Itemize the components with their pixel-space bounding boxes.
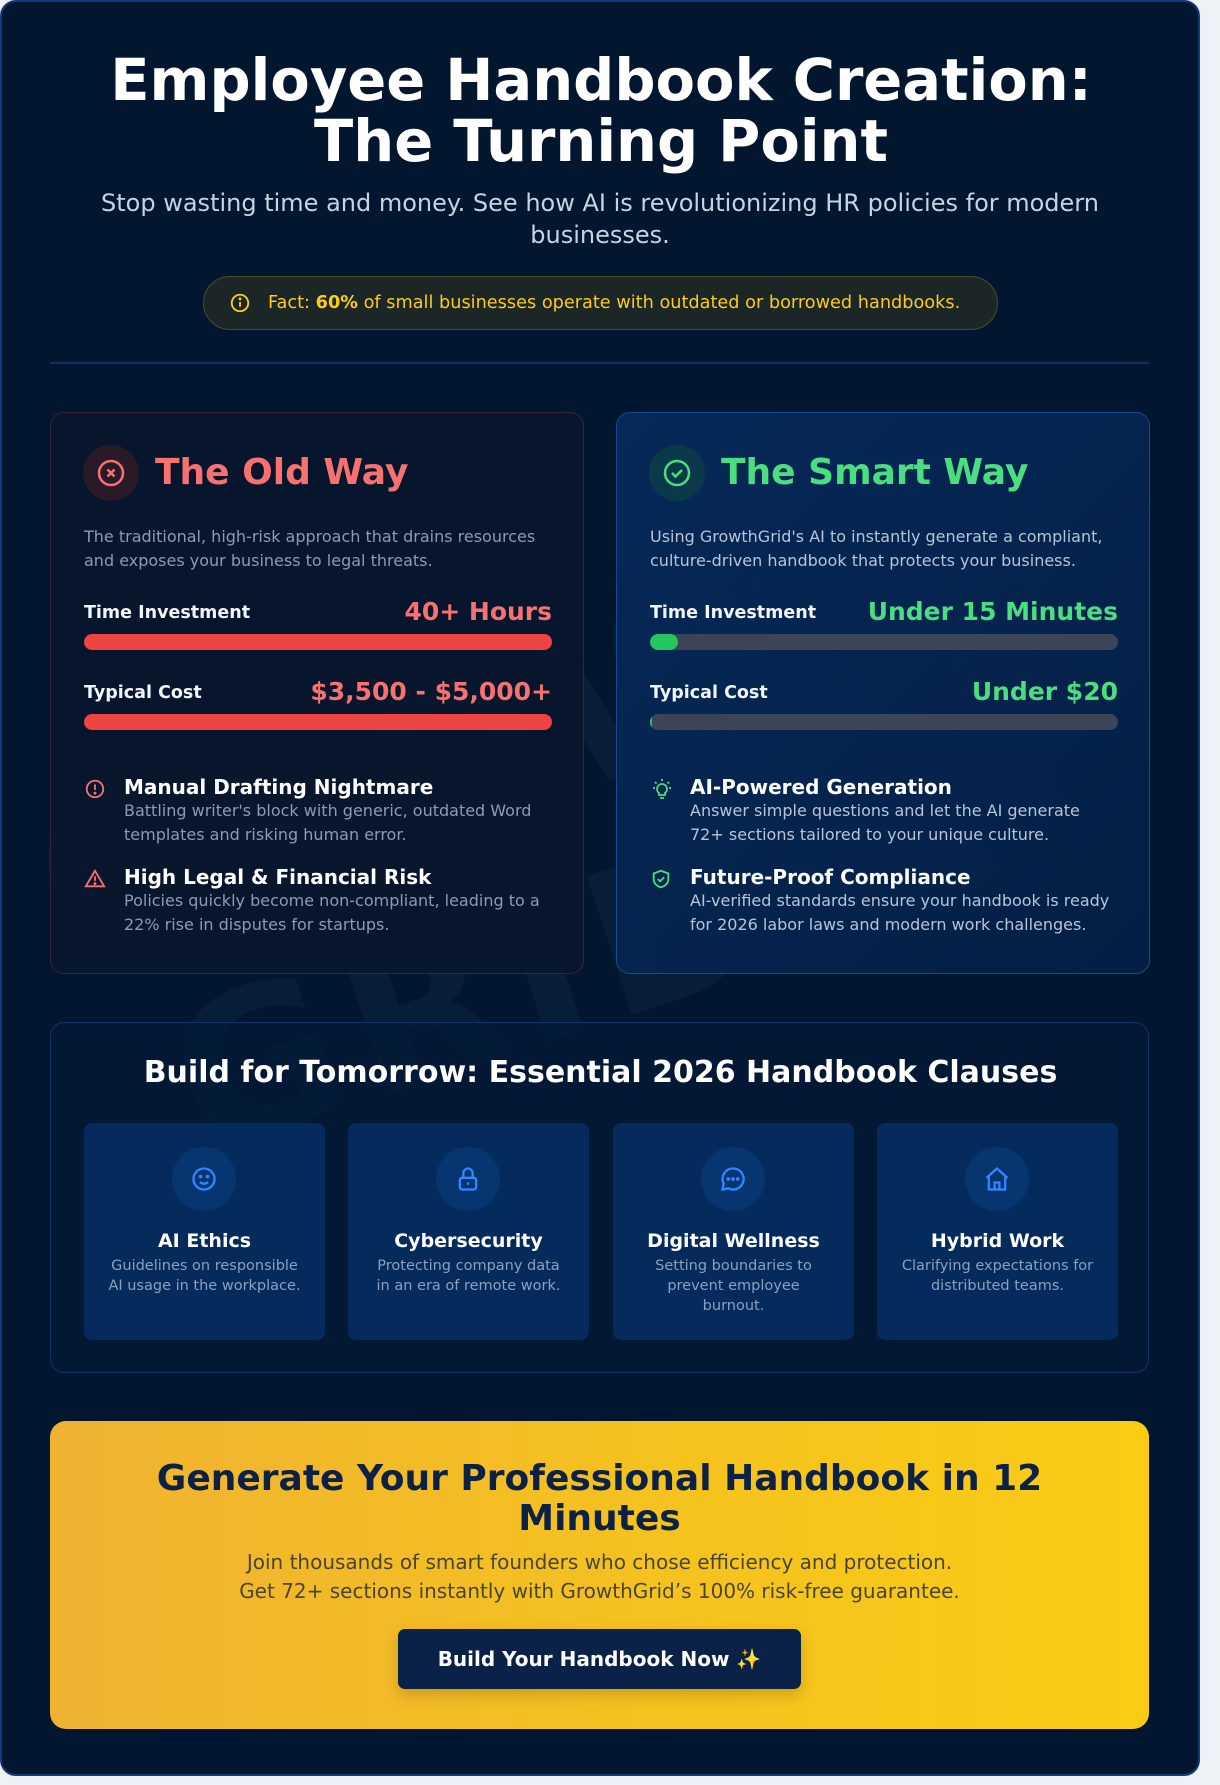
clause: AI ethics — [84, 1123, 325, 1340]
main card: GROWTH — [9, 442, 1124, 1002]
heading: old way — [83, 445, 408, 501]
cta button — [398, 1629, 801, 1689]
description: The traditional, high-risk approach that drains resources and exposes your business to legal threats. — [84, 527, 535, 570]
call to action — [50, 1421, 1149, 1729]
panel: old way — [50, 412, 584, 974]
panel: old way: Battling writer's block with generic, outdated Word templates and risking human error. — [124, 801, 531, 844]
heading: smart way — [649, 445, 1028, 501]
panel: old way: Manual Drafting Nightmare — [124, 775, 433, 799]
feature: legal risk — [84, 865, 540, 934]
panel: old way: Time Investment — [84, 603, 250, 623]
time bar — [84, 597, 552, 650]
clause: hybrid work: Clarifying expectations for distributed teams. — [902, 1258, 1093, 1294]
panel: old way: Policies quickly become non-compliant, leading to a 22% rise in disputes for startups. — [124, 891, 540, 934]
panel: smart way: Answer simple questions and let the AI generate 72+ sections tailored to your unique culture. — [690, 801, 1080, 844]
cta button: Build Your Handbook Now ✨ — [438, 1647, 761, 1671]
title: The Turning Point — [314, 108, 888, 175]
panel: smart way: AI-verified standards ensure your handbook is ready for 2026 labor laws and modern work challenges. — [690, 891, 1109, 934]
clause: hybrid work: Hybrid Work — [931, 1230, 1064, 1252]
panel: old way: The Old Way — [155, 452, 408, 493]
clause: cybersecurity — [348, 1123, 589, 1340]
fact pill: Fact: 60% of small businesses operate with outdated or borrowed handbooks. — [268, 293, 960, 313]
description: Using GrowthGrid's AI to instantly generate a compliant, culture-driven handbook that protects your business. — [650, 527, 1102, 570]
panel: smart way: The Smart Way — [721, 452, 1028, 493]
panel: old way: $3,500 - $5,000+ — [310, 677, 552, 706]
clause: AI ethics: AI Ethics — [158, 1230, 251, 1252]
clause: digital wellness: Digital Wellness — [647, 1230, 820, 1252]
panel: smart way: Time Investment — [650, 603, 816, 623]
feature: compliance — [652, 865, 1109, 934]
panel: old way: 40+ Hours — [404, 597, 552, 626]
clause: hybrid work — [877, 1123, 1118, 1340]
clause: digital wellness: Setting boundaries to prevent employee burnout. — [655, 1258, 812, 1314]
panel: old way: Typical Cost — [84, 683, 202, 703]
main card: GRID.AI — [144, 681, 1131, 1200]
clauses heading: Build for Tomorrow: Essential 2026 Handbook Clauses — [144, 1055, 1057, 1090]
feature: manual drafting — [86, 775, 531, 844]
title: Employee Handbook Creation: — [110, 47, 1092, 114]
cost bar — [84, 677, 552, 730]
clause: digital wellness — [613, 1123, 854, 1340]
panel: smart way: Under $20 — [972, 677, 1118, 706]
panel: smart way: Typical Cost — [650, 683, 768, 703]
feature: AI generation — [653, 775, 1080, 844]
panel: clauses — [50, 1022, 1149, 1373]
cta text: Get 72+ sections instantly with GrowthGrid’s 100% risk-free guarantee. — [239, 1578, 960, 1602]
panel: smart way: Future-Proof Compliance — [690, 865, 971, 889]
panel: smart way — [616, 412, 1150, 974]
cta text: Join thousands of smart founders who chose efficiency and protection. — [247, 1550, 952, 1574]
panel: smart way: Under 15 Minutes — [868, 597, 1118, 626]
clause: cybersecurity: Cybersecurity — [394, 1230, 543, 1252]
cta text — [239, 1550, 960, 1602]
clause: cybersecurity: Protecting company data in an era of remote work. — [377, 1258, 560, 1294]
panel: old way: High Legal & Financial Risk — [124, 865, 431, 889]
cta heading: Generate Your Professional Handbook in 12 Minutes — [157, 1458, 1042, 1539]
subtitle: Stop wasting time and money. See how AI is revolutionizing HR policies for modern businesses. — [101, 189, 1099, 249]
cost bar — [650, 677, 1118, 730]
fact pill — [203, 276, 998, 330]
panel: smart way: AI-Powered Generation — [690, 775, 952, 799]
title — [110, 47, 1092, 175]
time bar — [650, 597, 1118, 650]
clause: AI ethics: Guidelines on responsible AI usage in the workplace. — [108, 1258, 301, 1294]
